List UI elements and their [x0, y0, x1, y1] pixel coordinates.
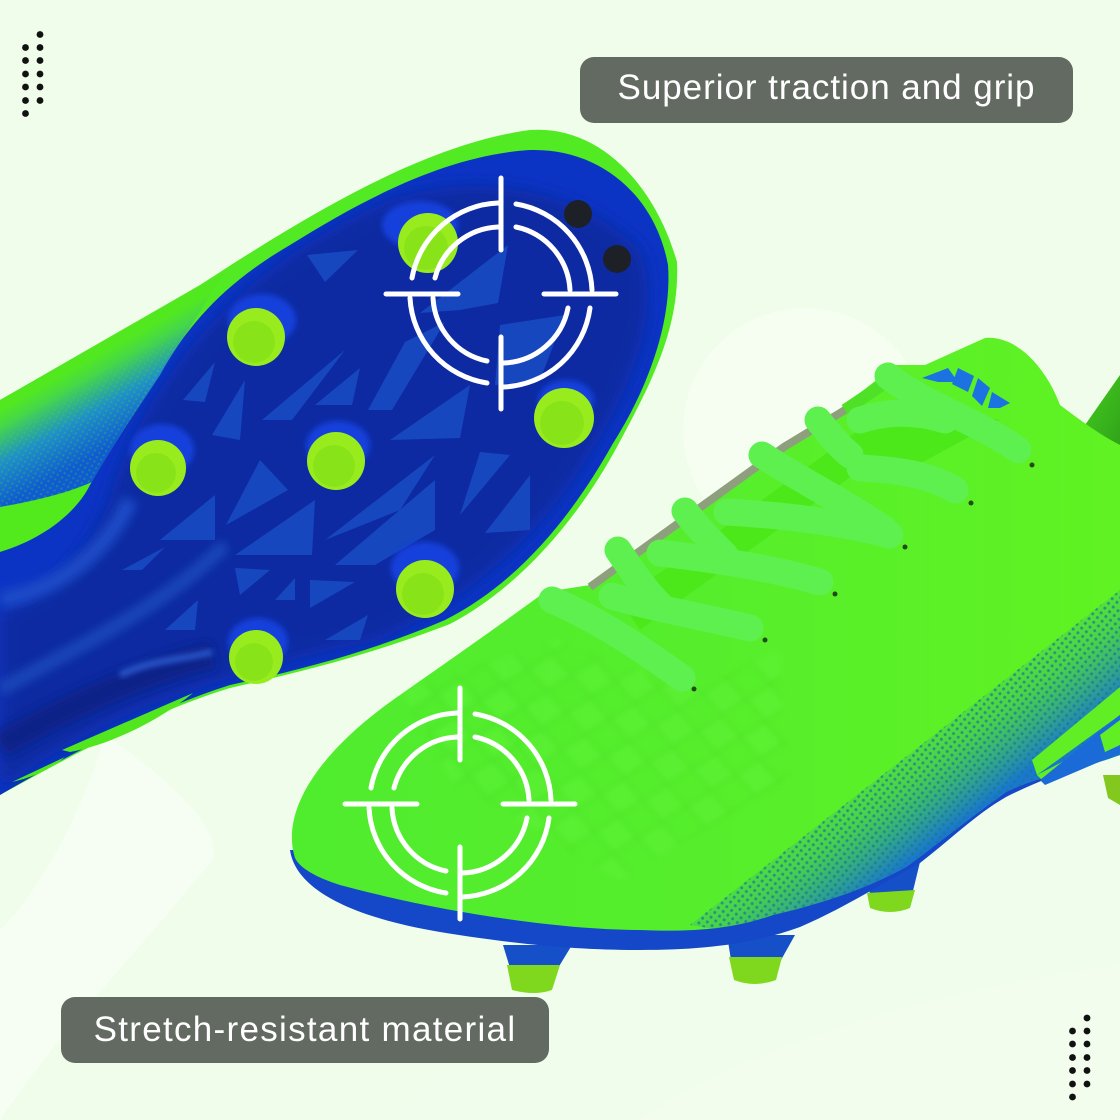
target icon: sole	[386, 178, 616, 409]
label: traction: Superior traction and grip	[618, 68, 1035, 107]
lace dark ends	[692, 462, 1034, 692]
toe diamond texture	[403, 686, 412, 693]
heel green patches	[62, 693, 193, 752]
label: material: Stretch-resistant material	[94, 1010, 516, 1049]
label: material	[61, 997, 549, 1063]
logo	[922, 368, 1010, 408]
shoe sole	[0, 130, 677, 795]
target icon: toe	[345, 688, 575, 919]
sole blue plate	[0, 150, 668, 795]
laces	[552, 376, 1018, 678]
studs	[130, 213, 594, 684]
halftone band	[690, 590, 1120, 940]
plate dark centre	[0, 186, 648, 790]
studs below shoe	[503, 945, 572, 968]
grey strip	[590, 410, 845, 587]
upper	[292, 338, 1120, 931]
decorative dots top left	[22, 31, 43, 117]
shoe side view	[290, 338, 1120, 993]
lace opening panels	[630, 418, 1000, 630]
heel tab	[1078, 375, 1120, 460]
side stripe	[1032, 687, 1120, 775]
label: traction	[580, 57, 1073, 123]
outsole	[290, 700, 1120, 950]
heel ridge	[0, 500, 130, 600]
stud bases	[130, 201, 594, 666]
upper fade on sole view	[0, 272, 225, 552]
decorative dots bottom right	[1069, 1015, 1090, 1100]
tread pattern	[122, 245, 565, 640]
green wedge	[0, 482, 92, 552]
sole outer green rim	[0, 130, 677, 795]
bolts	[564, 200, 592, 228]
